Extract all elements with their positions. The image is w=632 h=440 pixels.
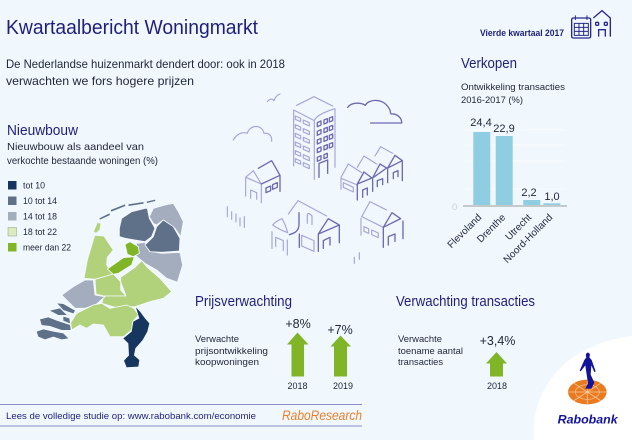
nieuwbouw description: Nieuwbouw als aandeel van: [7, 141, 144, 153]
grass bottom: [354, 253, 359, 263]
value 2018: +3,4%: [480, 334, 515, 348]
bar labels: Flevoland: [446, 212, 484, 251]
bar chart: transactions: 0: [452, 202, 457, 213]
logo globe: [568, 380, 607, 404]
bar chart: transactions: [446, 117, 567, 266]
title: Kwartaalbericht Woningmarkt: [6, 16, 258, 39]
map of the Netherlands: [37, 200, 183, 367]
bar values: 24,4: [470, 117, 492, 129]
map legend: tot 10: [23, 180, 45, 192]
map legend: 18 tot 22: [23, 227, 57, 238]
nieuwbouw description: [7, 141, 158, 167]
heading: verkopen: Verkopen: [461, 56, 517, 72]
heading: verwachting transacties: Verwachting transacties: [396, 294, 535, 310]
panel: nieuwbouw: [7, 123, 183, 367]
footer link text: Lees de volledige studie op: www.rabobank.com/economie: [6, 411, 256, 422]
apartment block: [294, 97, 335, 179]
intro text: [6, 57, 285, 88]
raboresearch label: RaboResearch: [282, 407, 362, 423]
prijsverwachting description: [195, 334, 268, 368]
small house left: [246, 161, 280, 203]
logo wordmark: Rabobank: [558, 413, 619, 427]
map: southern provinces: [37, 280, 149, 367]
year 2018: 2018: [487, 381, 507, 391]
bar values: 1,0: [544, 191, 560, 203]
value 2019: +7%: [327, 323, 353, 337]
year 2019: 2019: [333, 381, 353, 391]
panel: verwachting transacties: [396, 294, 535, 391]
transacties description: Verwachte: [398, 334, 442, 345]
panel: verkopen: [446, 56, 567, 266]
house bottom right: [361, 202, 403, 247]
icon: calendar and house: [572, 11, 610, 38]
prijsverwachting description: prijsontwikkeling: [195, 346, 268, 357]
map: central and western provinces: [84, 235, 172, 307]
bar labels: Drenthe: [475, 212, 508, 245]
quarter label: Vierde kwartaal 2017: [480, 28, 564, 39]
intro text: verwachten we fors hogere prijzen: [6, 74, 194, 88]
illustration: houses, clouds and apartment block: [227, 94, 403, 263]
bar labels: Noord-Holland: [502, 212, 555, 266]
arrow 2018: [486, 352, 507, 376]
rabobank logo: [558, 353, 619, 427]
heading: nieuwbouw: Nieuwbouw: [7, 123, 78, 139]
logo figure: [580, 353, 596, 389]
transacties description: toename aantal: [398, 346, 463, 357]
bar values: 2,2: [521, 187, 537, 199]
verkopen description: Ontwikkeling transacties: [461, 82, 565, 93]
map legend: meer dan 22: [23, 242, 71, 254]
verkopen description: 2016-2017 (%): [461, 95, 523, 106]
bird: [267, 94, 280, 102]
year 2018: 2018: [287, 381, 308, 391]
value 2018: +8%: [285, 317, 311, 331]
map: northern provinces: [93, 200, 183, 282]
transacties description: transacties: [398, 357, 443, 368]
map legend: 10 tot 14: [23, 196, 57, 207]
bar values: 22,9: [493, 123, 515, 135]
arrow 2019: [330, 336, 351, 376]
arrow 2018: [287, 332, 308, 376]
heading: prijsverwachting: Prijsverwachting: [195, 294, 292, 310]
verkopen description: [461, 82, 565, 106]
prijsverwachting description: Verwachte: [195, 334, 239, 345]
bar labels: Utrecht: [504, 212, 534, 243]
bar values: [470, 117, 560, 203]
rabobank corner panel: [534, 336, 632, 440]
cloud left: [233, 126, 272, 141]
footer: [0, 404, 362, 426]
intro text: De Nederlandse huizenmarkt dendert door: ook in 2018: [6, 57, 285, 71]
prijsverwachting description: koopwoningen: [195, 357, 259, 368]
nieuwbouw description: verkochte bestaande woningen (%): [7, 156, 158, 167]
grass left: [227, 207, 244, 227]
map legend: [8, 180, 71, 254]
panel: prijsverwachting: [195, 294, 353, 391]
bar labels: [446, 212, 555, 266]
row of houses right: [341, 147, 402, 200]
transacties description: [398, 334, 463, 368]
map legend: 14 tot 18: [23, 212, 57, 222]
cloud right: [348, 100, 402, 123]
large house bottom centre: [272, 201, 339, 255]
